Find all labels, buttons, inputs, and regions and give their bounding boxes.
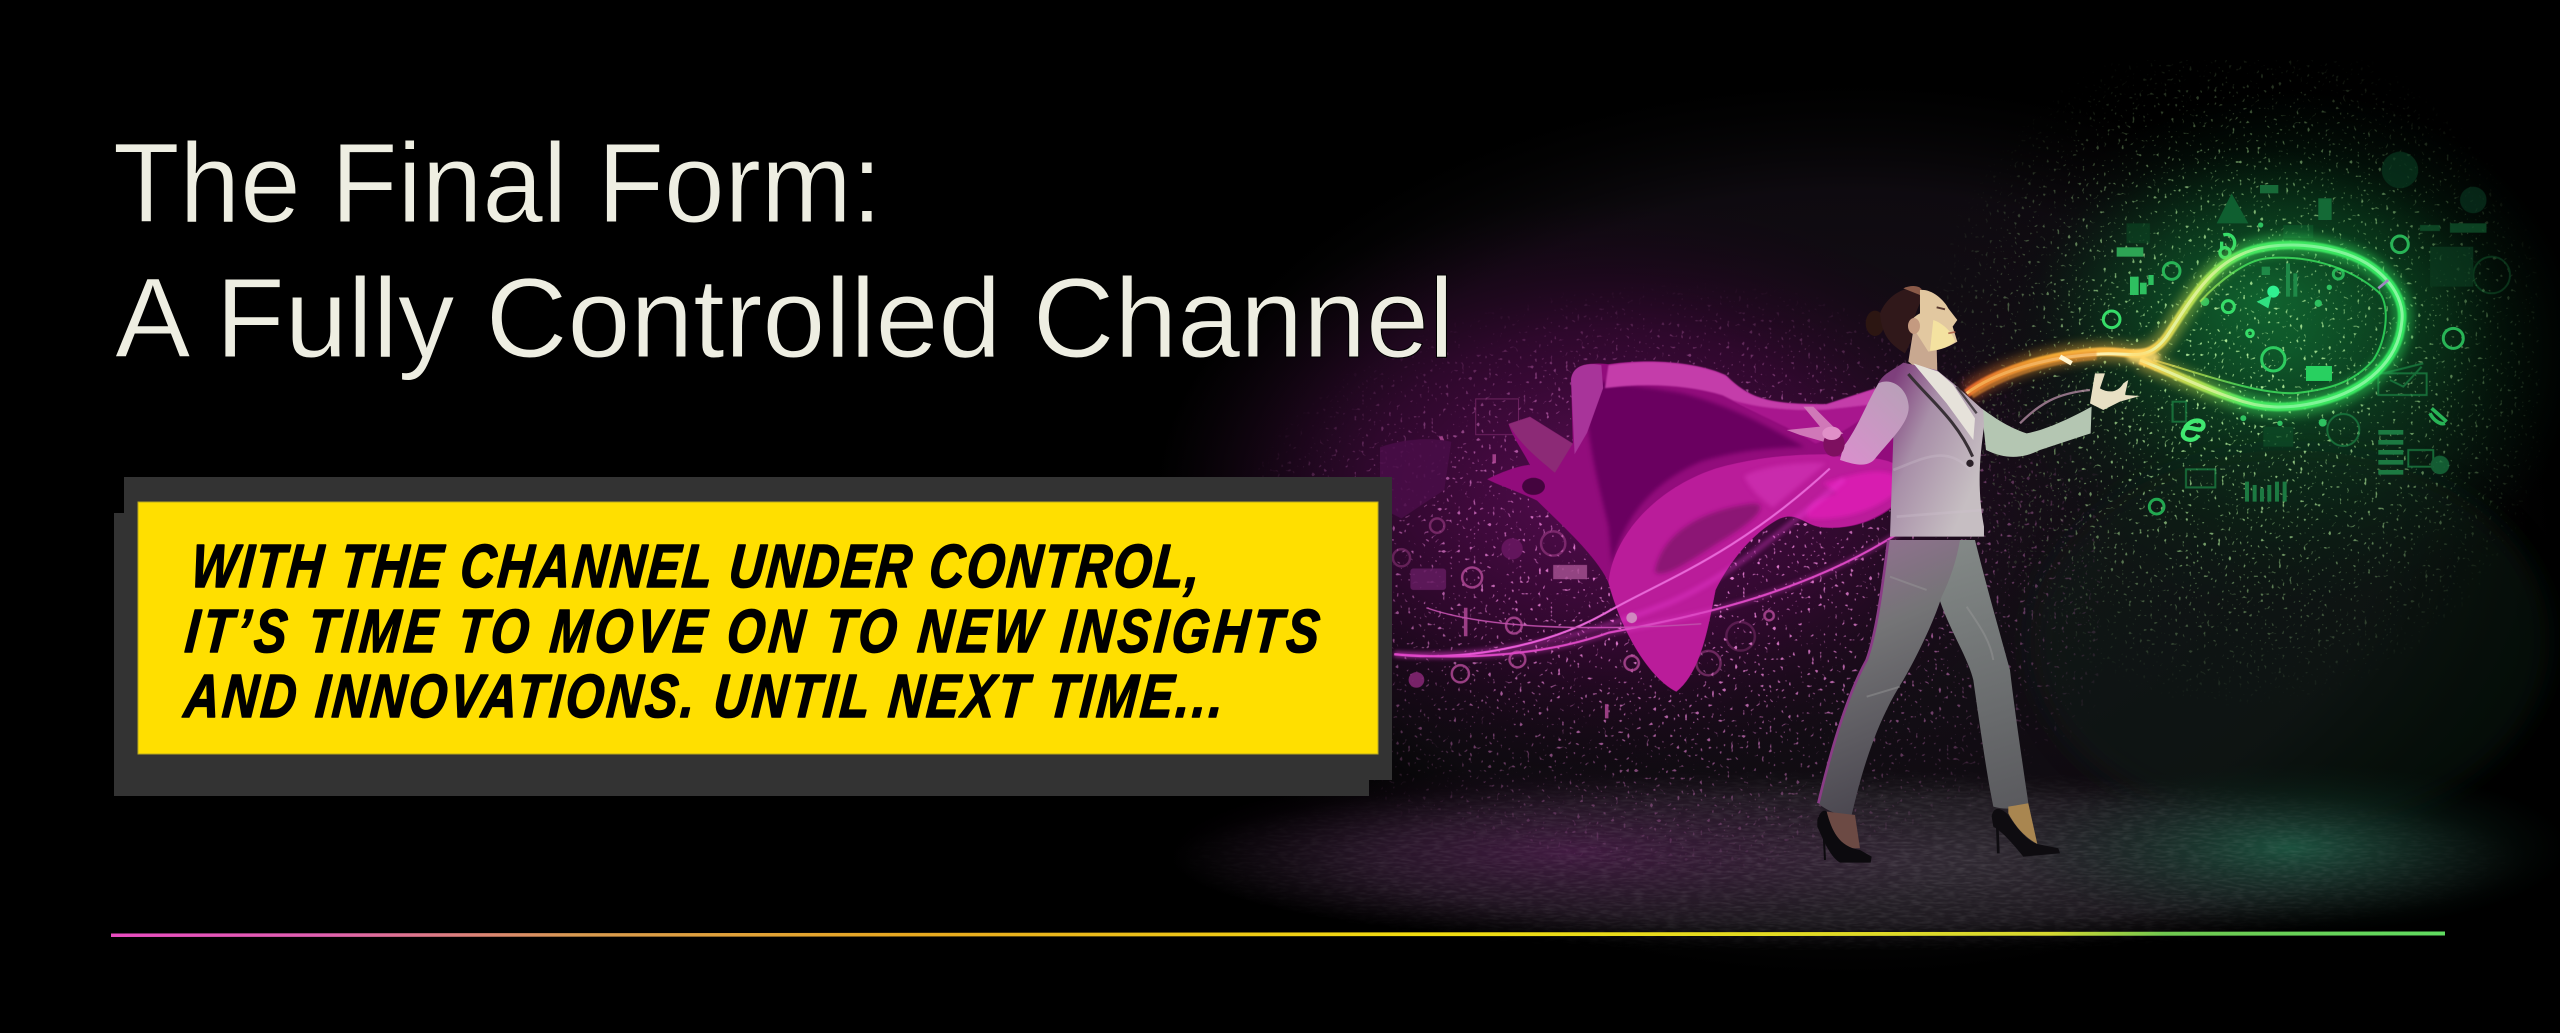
legs and shoes: [1817, 540, 2060, 863]
cape lower swirl: [1608, 454, 1914, 692]
cape swirl shadow: [1655, 504, 1760, 573]
cape left flap: [1509, 417, 1573, 473]
callout text: AND INNOVATIONS. UNTIL NEXT TIME...: [180, 662, 1226, 730]
dim icons: [2127, 152, 2510, 487]
right-side tech icons in green: [2103, 152, 2510, 514]
loop glow: [1967, 245, 2402, 407]
left ribbon widening: [1968, 351, 2097, 398]
loop body: [1967, 245, 2402, 407]
callout text: [180, 532, 1322, 730]
background haze and floor: [1204, 130, 2545, 948]
left hand and cuff: [1787, 407, 1843, 442]
woman figure: [1787, 286, 2140, 863]
shirt: [1913, 363, 1975, 440]
callout offset shadow: [114, 477, 1392, 796]
callout text: IT’S TIME TO MOVE ON TO NEW INSIGHTS: [183, 597, 1322, 665]
cape: [1394, 362, 1930, 692]
cape dark inner fold: [1586, 379, 1805, 565]
right arm and hand: [1982, 407, 2092, 457]
particles: [1259, 60, 2540, 868]
inner strand: [2153, 258, 2386, 393]
bottom gradient rule: [111, 932, 2445, 937]
jacket: [1878, 363, 1984, 537]
cape silhouette: [1487, 362, 1916, 692]
callout yellow panel: [138, 502, 1378, 754]
infinity loop of light: [1967, 245, 2402, 407]
title: A Fully Controlled Channel: [115, 255, 1454, 381]
magenta icons: [1380, 399, 1774, 718]
title: [113, 120, 1454, 381]
photo scene: woman with cape and infinity loop: [1140, 60, 2560, 980]
title: The Final Form:: [113, 120, 882, 246]
cape top highlight: [1605, 362, 1876, 429]
torso, arms and head: [1787, 286, 2140, 537]
left sleeve: [1840, 382, 1909, 465]
callout text: WITH THE CHANNEL UNDER CONTROL,: [189, 532, 1203, 600]
head: [1908, 330, 1937, 373]
lapel: [1908, 374, 1973, 457]
callout box: [114, 477, 1392, 796]
bright icons: [2103, 234, 2463, 514]
light strands: [1394, 469, 1930, 656]
bar icons: [2245, 430, 2403, 502]
crossing sparkle: [2060, 357, 2072, 363]
